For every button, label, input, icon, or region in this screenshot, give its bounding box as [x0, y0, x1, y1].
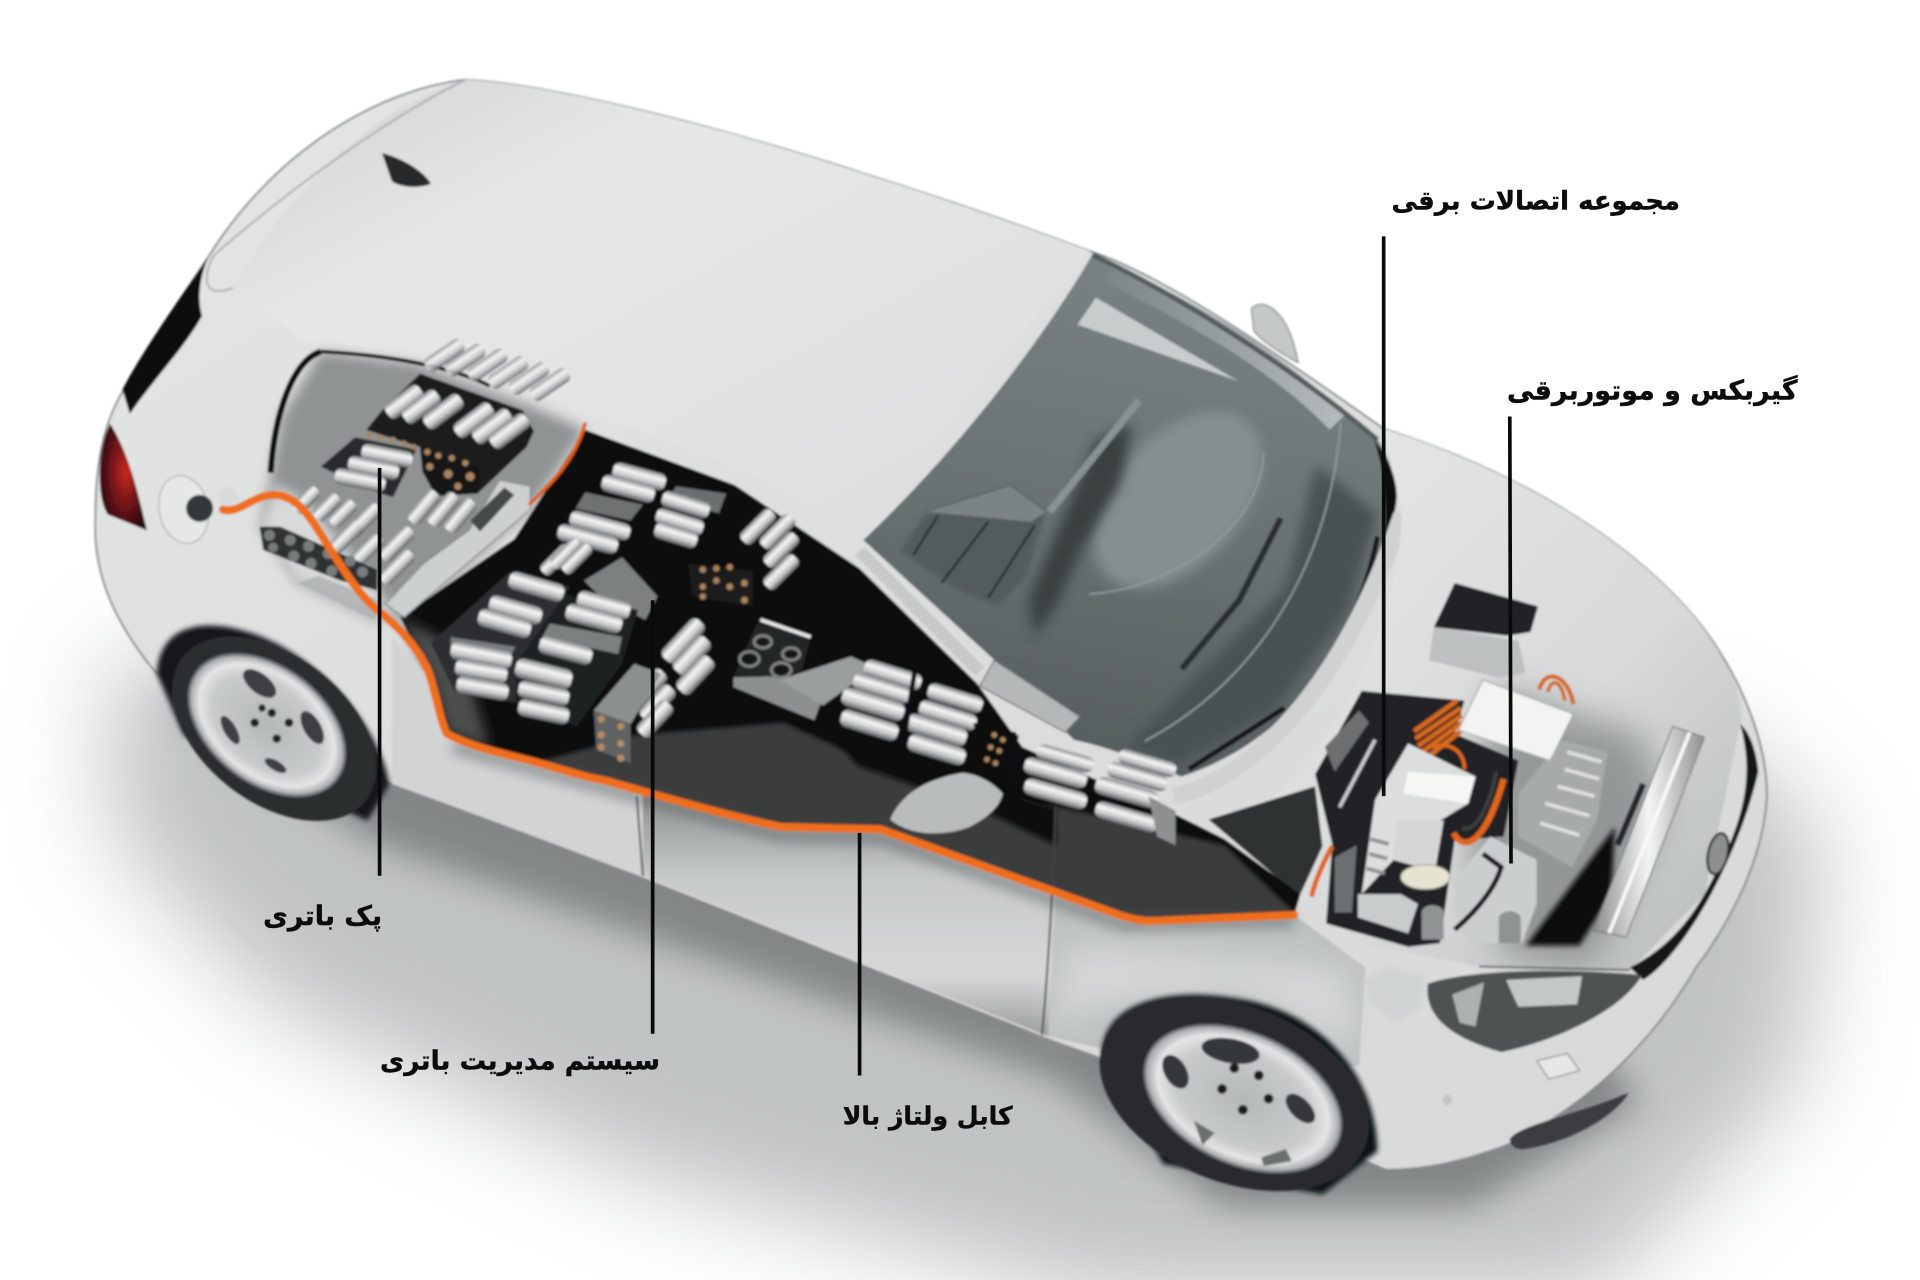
bracket slots	[470, 488, 514, 532]
door seams	[637, 796, 1056, 1035]
front fender below cable	[1048, 894, 1365, 1078]
module: front floor pack	[780, 657, 1178, 834]
core bracket detail	[1325, 710, 1369, 913]
steering column	[1049, 401, 1139, 512]
rear hatch seam	[207, 80, 465, 291]
rear pack base strip	[298, 576, 386, 620]
capacitors	[1422, 905, 1521, 943]
module: rear end panel honeycomb	[260, 527, 377, 590]
bay shading	[1469, 686, 1665, 968]
floor fade at rear	[400, 617, 490, 747]
module: rear second row	[382, 382, 532, 451]
fender lower highlight	[1053, 943, 1359, 1053]
wipers	[1189, 536, 1378, 769]
base bracket	[1358, 894, 1418, 933]
ring terminals	[733, 620, 822, 720]
battery modules	[260, 337, 1178, 834]
module: lower centre stack	[513, 589, 638, 726]
dash arcs	[1090, 423, 1341, 741]
seat lines	[913, 516, 1035, 598]
module: rear lower block	[321, 437, 416, 497]
roof panel	[233, 80, 1090, 540]
module: rear dark frame	[366, 374, 534, 494]
black hose	[1455, 854, 1501, 930]
fuel flap and charge plug	[153, 471, 240, 548]
transmission tunnel	[584, 557, 658, 620]
rear door panel	[392, 637, 643, 876]
dark cavity	[1526, 827, 1615, 946]
rear window strip	[122, 257, 208, 414]
cable shadow	[453, 747, 1294, 925]
module: rear left cylinders	[290, 484, 479, 587]
silver side frame	[1340, 740, 1375, 807]
module: middle top	[556, 461, 726, 555]
orange loop cable	[1433, 745, 1504, 842]
roof pillar band	[1108, 272, 1337, 423]
compressor	[1363, 966, 1424, 1023]
hood	[1224, 429, 1741, 970]
door panel below cable	[643, 791, 1056, 1036]
edge top	[1092, 255, 1378, 440]
label: gearbox and motor: گیربکس و موتوربرقی	[1507, 374, 1798, 406]
car illustration	[95, 80, 1767, 1228]
under-pack black band	[833, 735, 1056, 845]
lower hood cut edge	[1479, 966, 1630, 970]
terminal strip at firewall	[1149, 796, 1176, 845]
cream disc	[1401, 865, 1450, 889]
leader: high voltage cable	[858, 833, 861, 1075]
module: small diagonal	[538, 536, 594, 577]
cowl floor dark panel	[1209, 786, 1322, 894]
orange feed cable in bay	[1311, 846, 1332, 897]
white inverter box	[1458, 680, 1573, 761]
shark fin antenna	[382, 153, 431, 187]
connector block with terminals	[367, 432, 480, 496]
leader: gearbox and motor	[1510, 416, 1511, 864]
leader: battery management	[651, 600, 654, 1034]
ground shadow	[110, 612, 1824, 1280]
leader: battery pack	[378, 468, 381, 876]
seat top	[927, 486, 1046, 522]
12V battery	[1429, 583, 1538, 677]
rear wheel	[137, 599, 411, 858]
module: lower left stack	[431, 570, 569, 703]
cabin floor charcoal	[539, 723, 1294, 921]
module: rear top translucent row	[422, 337, 572, 403]
motor housing	[1455, 837, 1537, 943]
front A-pillar band	[1173, 514, 1402, 796]
grille edge	[1630, 724, 1758, 980]
rear cutaway	[260, 352, 585, 620]
dash oval	[1061, 380, 1295, 620]
high voltage orange cable	[223, 495, 1294, 921]
VW badge	[1704, 831, 1732, 876]
label: electrical connections: مجموعه اتصالات برقی	[1392, 186, 1680, 216]
label: high voltage cable: کابل ولتاژ بالا	[843, 1101, 1013, 1131]
pale rear window	[1078, 298, 1238, 381]
orange cable branch to rear pack	[529, 423, 585, 505]
silver bracket	[386, 480, 530, 617]
heat sink	[1518, 740, 1608, 867]
headlight	[1427, 971, 1642, 1052]
A-pillar band	[860, 551, 980, 671]
module: middle upright	[738, 507, 801, 592]
radiator	[1593, 726, 1704, 937]
tail light	[100, 424, 147, 530]
right lower dark wedge	[1127, 465, 1378, 766]
radiator side bar	[1618, 784, 1643, 845]
module: lower upright	[594, 616, 717, 763]
far side mirror	[1251, 305, 1298, 363]
black pillar bulge	[1374, 440, 1397, 539]
leader: electrical connections	[1382, 236, 1385, 796]
A-pillar bracket	[980, 660, 1080, 732]
windshield	[863, 255, 1397, 777]
interior dark	[1029, 423, 1133, 637]
bumper details	[1442, 1053, 1629, 1149]
label: battery management system: سیستم مدیریت باتری	[380, 1045, 660, 1076]
car body	[95, 80, 1767, 1170]
engine bay	[1209, 583, 1758, 1023]
side mirror	[890, 773, 1003, 833]
white power unit	[1362, 744, 1476, 894]
connector with copper terminals	[688, 563, 753, 606]
front wheel	[1071, 959, 1398, 1228]
orange coils	[1414, 676, 1573, 761]
vent	[1182, 518, 1281, 669]
label: battery pack: پک باتری	[263, 901, 382, 932]
electronics dark core	[1315, 691, 1518, 947]
cabin floor black	[400, 430, 1300, 921]
seat panel	[900, 486, 1046, 606]
